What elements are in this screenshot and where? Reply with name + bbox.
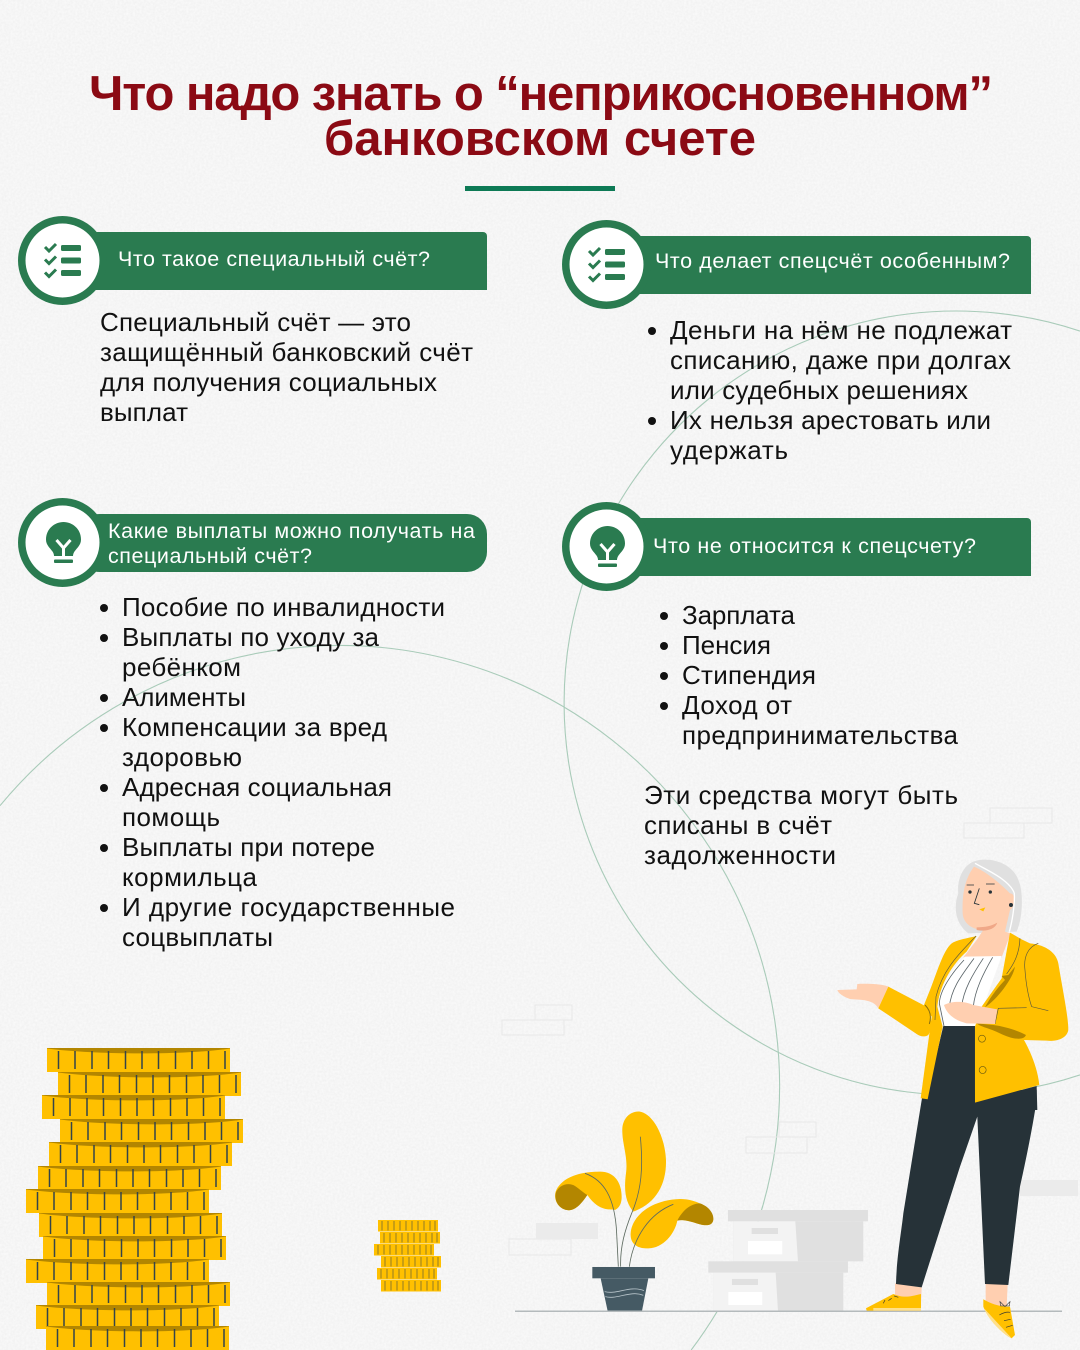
list: special properties: Их нельзя арестовать или [670, 405, 991, 435]
list: special properties: удержать [670, 435, 788, 465]
icon: light bulb [18, 498, 107, 587]
list: eligible payments: Пособие по инвалидности [122, 592, 445, 622]
illustration: presenter woman [837, 860, 1068, 1338]
list: eligible payments: ребёнком [122, 652, 241, 682]
heading bar: what does not count: Что не относится к спецсчету? [653, 534, 976, 558]
text: definition [100, 307, 473, 427]
list: excluded income: Пенсия [682, 630, 771, 660]
list: excluded income: Зарплата [682, 600, 796, 630]
legs [866, 1090, 1037, 1338]
text: definition: защищённый банковский счёт [100, 337, 473, 367]
list: excluded income: Доход от [682, 690, 792, 720]
text: definition: выплат [100, 397, 188, 427]
list: eligible payments: здоровью [122, 742, 242, 772]
list: eligible payments: Компенсации за вред [122, 712, 387, 742]
panel: what is a special account [18, 216, 487, 427]
list: special properties: Деньги на нём не подлежат [670, 315, 1012, 345]
list: special properties [648, 315, 1012, 465]
panel: what does not count [562, 502, 1031, 870]
title [89, 67, 993, 166]
list: eligible payments: Выплаты при потере [122, 832, 375, 862]
icon: light bulb [562, 502, 651, 591]
panel: eligible payments [18, 498, 487, 952]
heading bar: what is a special account [90, 232, 487, 290]
icon: checklist [562, 220, 651, 309]
list: excluded income: Стипендия [682, 660, 816, 690]
text: debt note [644, 780, 958, 870]
panel: what makes the account special [562, 220, 1031, 465]
list: special properties: или судебных решениях [670, 375, 968, 405]
list: excluded income [660, 600, 959, 750]
text: debt note: списаны в счёт [644, 810, 832, 840]
text: debt note: Эти средства могут быть [644, 780, 958, 810]
list: excluded income: предпринимательства [682, 720, 959, 750]
heading bar: eligible payments [71, 514, 487, 572]
heading bar: what makes it special: Что делает спецсчёт особенным? [655, 249, 1010, 273]
text: definition: для получения социальных [100, 367, 437, 397]
list: eligible payments: соцвыплаты [122, 922, 273, 952]
illustration: document boxes [708, 1210, 868, 1311]
illustration: ground line [515, 1310, 1062, 1312]
list: eligible payments: Алименты [122, 682, 246, 712]
title: Что надо знать о “неприкосновенном” [89, 67, 993, 121]
icon: checklist [18, 216, 107, 305]
heading bar: what makes it special [634, 236, 1031, 294]
list: eligible payments: Выплаты по уходу за [122, 622, 380, 652]
heading bar: what does not count [634, 518, 1031, 576]
illustration: small coin stack [374, 1220, 441, 1292]
list: eligible payments: И другие государственные [122, 892, 455, 922]
upper body [837, 860, 1068, 1110]
list: eligible payments: кормильца [122, 862, 258, 892]
list: eligible payments: Адресная социальная [122, 772, 392, 802]
heading bar: what is a special account: Что такое специальный счёт? [118, 247, 430, 271]
title: банковском счете [324, 112, 756, 166]
text: debt note: задолженности [644, 840, 836, 870]
title divider [465, 186, 615, 191]
list: eligible payments [100, 592, 455, 952]
illustration: potted plant [555, 1112, 713, 1311]
illustration: tall coin stack [26, 1048, 243, 1350]
heading bar: eligible payments: Какие выплаты можно получать на [108, 519, 475, 543]
text: definition: Специальный счёт — это [100, 307, 411, 337]
list: eligible payments: помощь [122, 802, 220, 832]
list: special properties: списанию, даже при долгах [670, 345, 1011, 375]
heading bar: eligible payments: специальный счёт? [108, 544, 312, 568]
